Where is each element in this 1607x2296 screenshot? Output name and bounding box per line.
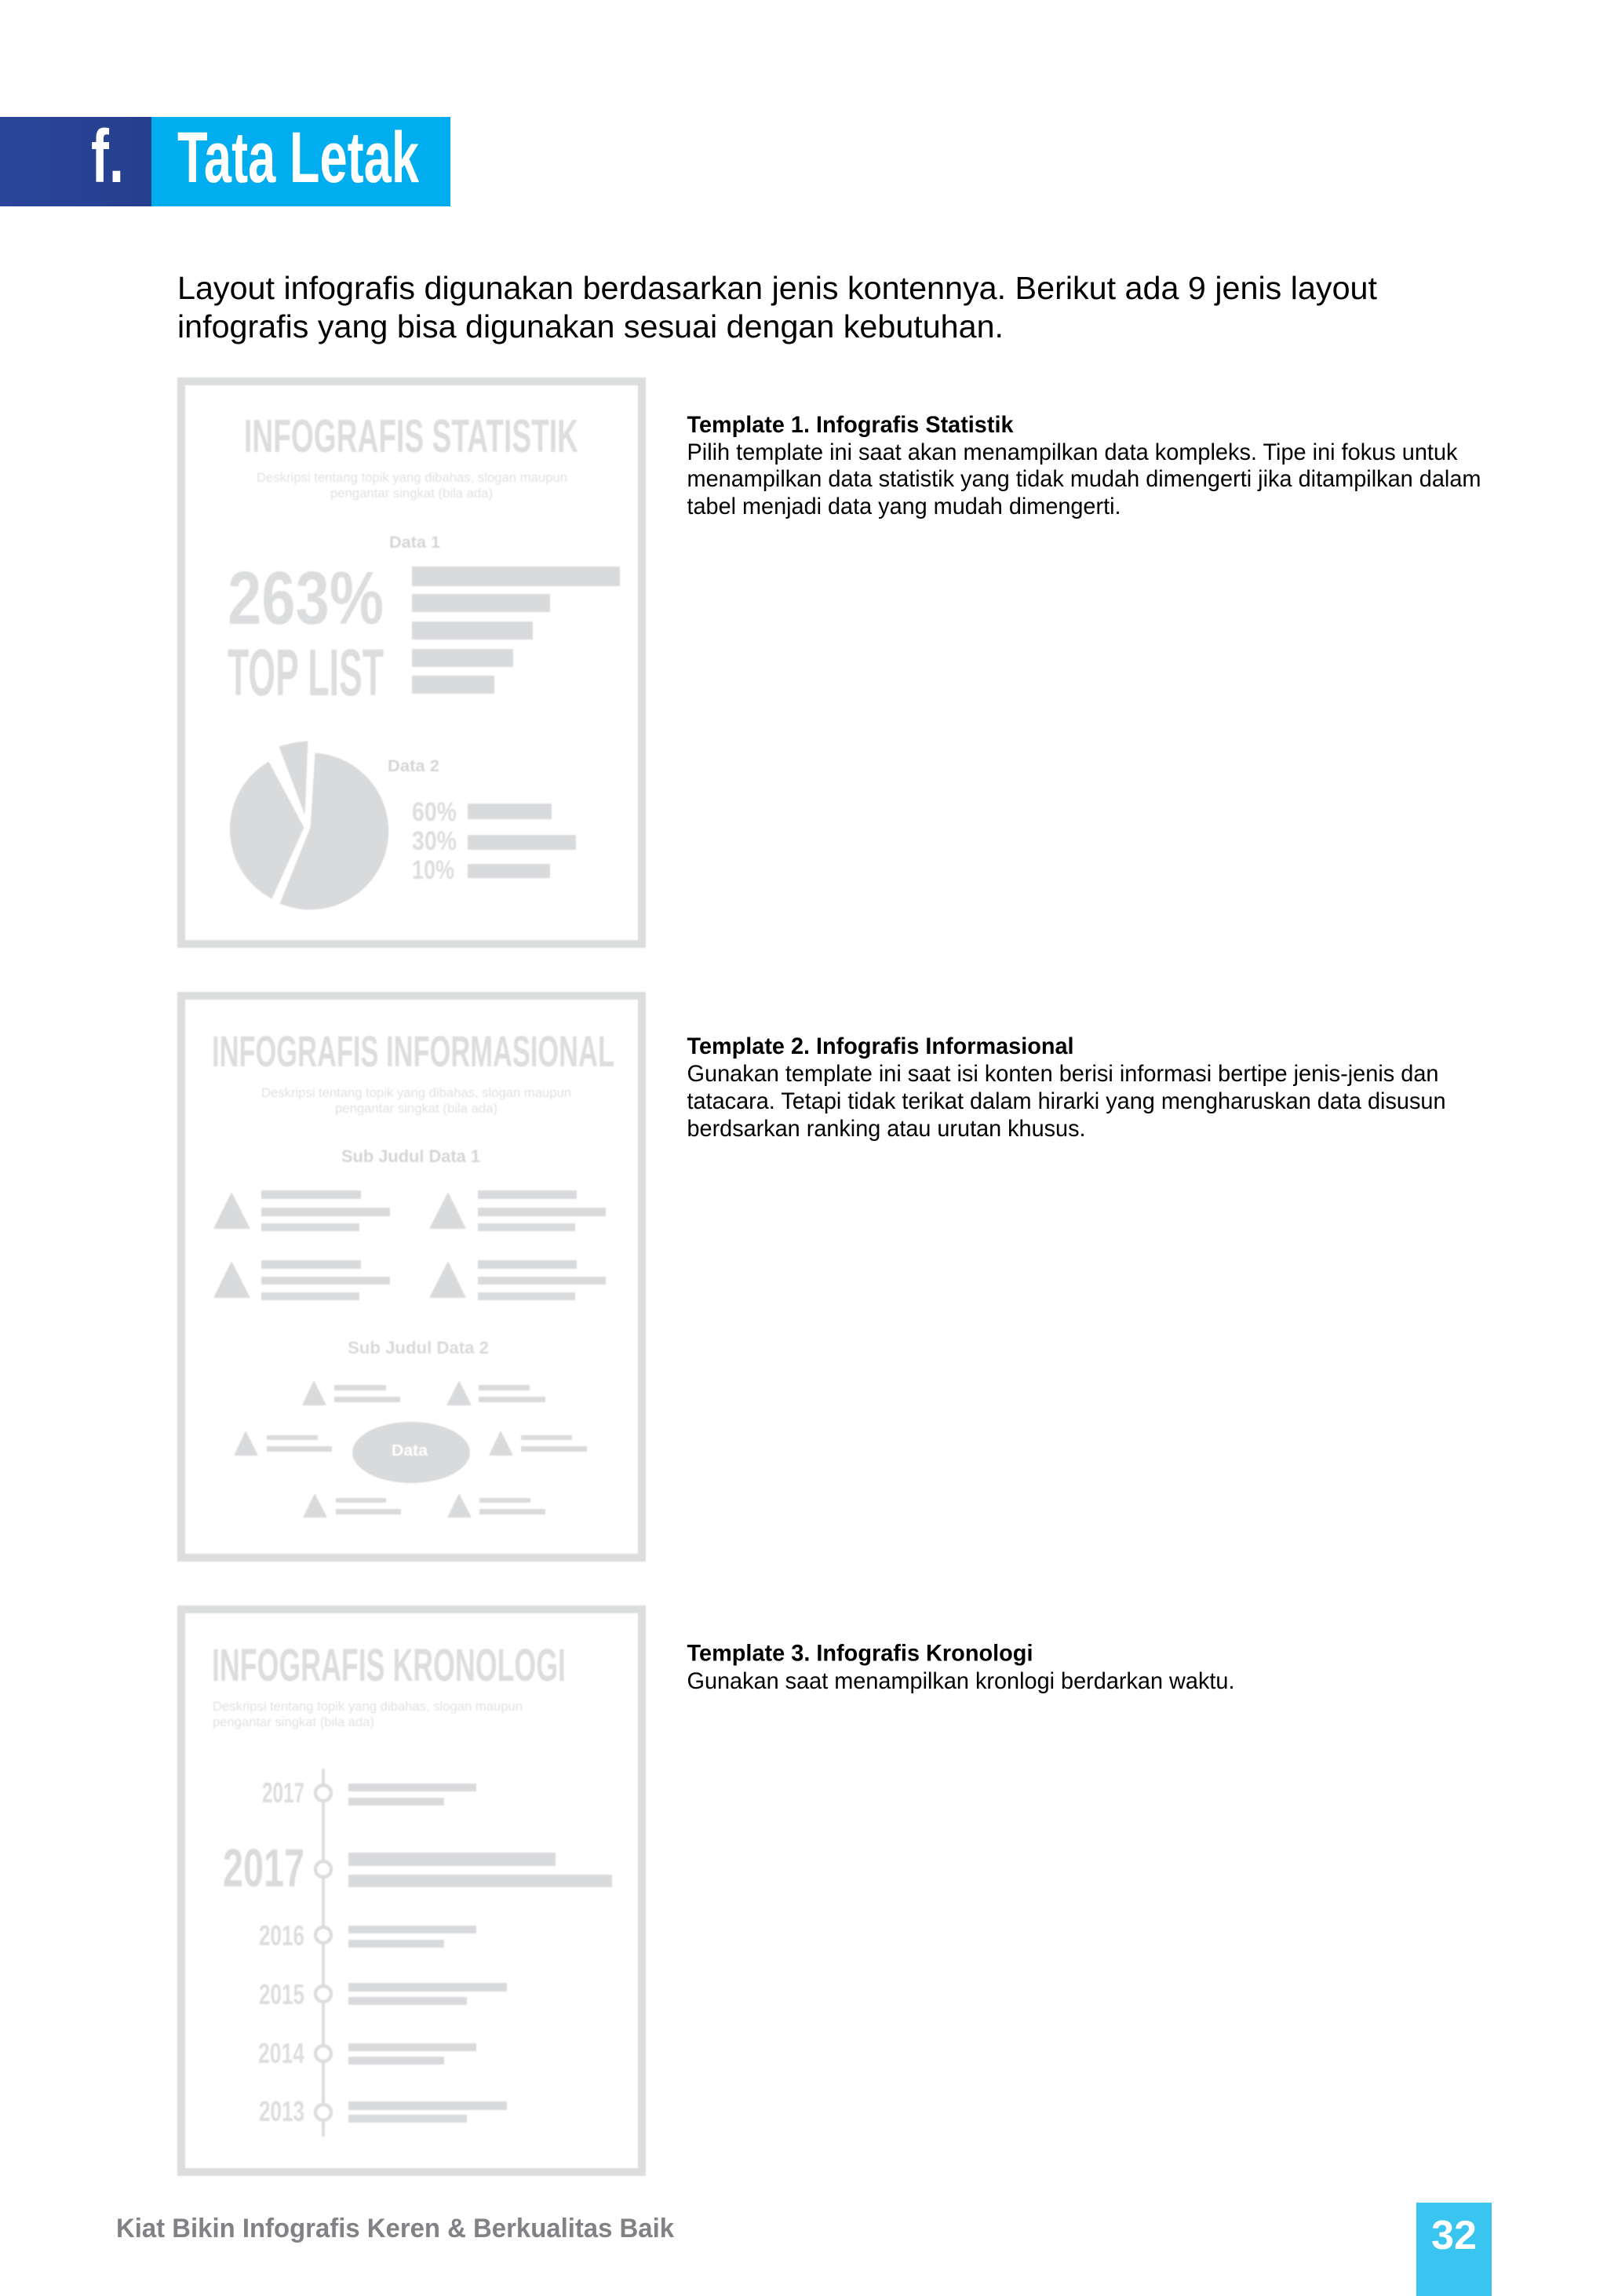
percentage labels: 60% xyxy=(412,797,457,827)
description: Deskripsi tentang topik yang dibahas, slogan maupun xyxy=(257,470,567,485)
text block: template 2: berdsarkan ranking atau urutan khusus. xyxy=(687,1116,1086,1142)
text block: template 2: tatacara. Tetapi tidak terikat dalam hirarki yang mengharuskan data disusun xyxy=(687,1088,1445,1114)
description xyxy=(257,470,567,501)
description: Deskripsi tentang topik yang dibahas, slogan maupun xyxy=(213,1699,523,1714)
heading: sub judul 1: Sub Judul Data 1 xyxy=(341,1146,480,1166)
year labels: 2017 xyxy=(262,1777,304,1809)
intro text xyxy=(177,270,1377,344)
text block: template 1: Template 1. Infografis Statistik xyxy=(687,412,1014,438)
text block: template 1: tabel menjadi data yang mudah dimengerti. xyxy=(687,494,1121,519)
heading: data 2: Data 2 xyxy=(388,757,439,775)
panel title: INFOGRAFIS STATISTIK xyxy=(244,410,578,462)
percentage labels: 30% xyxy=(412,826,457,856)
panel title: INFOGRAFIS INFORMASIONAL xyxy=(212,1026,614,1076)
section header banner xyxy=(0,115,450,206)
description: pengantar singkat (bila ada) xyxy=(213,1715,374,1729)
text block: template 1: menampilkan data statistik yang tidak mudah dimengerti jika ditampilkan dalam xyxy=(687,466,1481,492)
big number: 263% xyxy=(228,556,384,640)
heading: sub judul 2: Sub Judul Data 2 xyxy=(348,1338,489,1358)
radial icon diagram xyxy=(234,1380,587,1518)
footer title: Kiat Bikin Infografis Keren & Berkualitas Baik xyxy=(116,2214,674,2243)
section title: Tata Letak xyxy=(177,118,420,198)
description xyxy=(261,1085,571,1116)
intro text: Layout infografis digunakan berdasarkan jenis kontennya. Berikut ada 9 jenis layout xyxy=(177,270,1377,306)
year labels: 2017 xyxy=(223,1838,304,1898)
year labels: 2015 xyxy=(259,1978,304,2010)
panel: template 2 informasional xyxy=(181,996,642,1558)
description: Deskripsi tentang topik yang dibahas, slogan maupun xyxy=(261,1085,571,1100)
text block: template 1: Pilih template ini saat akan menampilkan data kompleks. Tipe ini fokus untuk xyxy=(687,439,1458,465)
pie chart xyxy=(230,741,388,909)
timeline text bars xyxy=(348,1784,612,2123)
text block: template 2 xyxy=(687,1033,1445,1142)
description: pengantar singkat (bila ada) xyxy=(335,1101,497,1116)
icon list grid xyxy=(213,1190,606,1300)
text block: template 3: Template 3. Infografis Kronologi xyxy=(687,1640,1033,1667)
intro text: infografis yang bisa digunakan sesuai dengan kebutuhan. xyxy=(177,308,1004,344)
top list label: TOP LIST xyxy=(228,636,384,709)
text block: template 2: Gunakan template ini saat isi konten berisi informasi bertipe jenis-jenis dan xyxy=(687,1061,1439,1087)
text block: template 3: Gunakan saat menampilkan kronlogi berdarkan waktu. xyxy=(687,1668,1235,1694)
description: pengantar singkat (bila ada) xyxy=(330,486,493,501)
percentage labels xyxy=(412,797,457,885)
year labels: 2016 xyxy=(259,1919,304,1952)
percentage labels: 10% xyxy=(412,855,454,885)
description xyxy=(213,1699,523,1729)
page number tab: 32 xyxy=(1431,2213,1477,2258)
bar chart: data 1 xyxy=(412,567,620,694)
year labels: 2014 xyxy=(258,2037,304,2069)
timeline xyxy=(315,1769,331,2137)
panel title: INFOGRAFIS KRONOLOGI xyxy=(212,1640,566,1691)
year labels: 2013 xyxy=(259,2095,304,2127)
text block: template 2: Template 2. Infografis Informasional xyxy=(687,1033,1073,1059)
text block: template 3 xyxy=(687,1640,1235,1694)
panel: template 3 kronologi xyxy=(181,1609,642,2172)
center label: Data xyxy=(392,1442,428,1460)
section letter: f. xyxy=(91,115,124,199)
text block: template 1 xyxy=(687,412,1481,519)
year labels xyxy=(223,1777,304,2127)
heading: data 1: Data 1 xyxy=(389,534,440,552)
bar chart: data 2 xyxy=(468,804,576,878)
panel: template 1 statistik xyxy=(181,381,642,944)
page number tab xyxy=(1416,2203,1492,2296)
